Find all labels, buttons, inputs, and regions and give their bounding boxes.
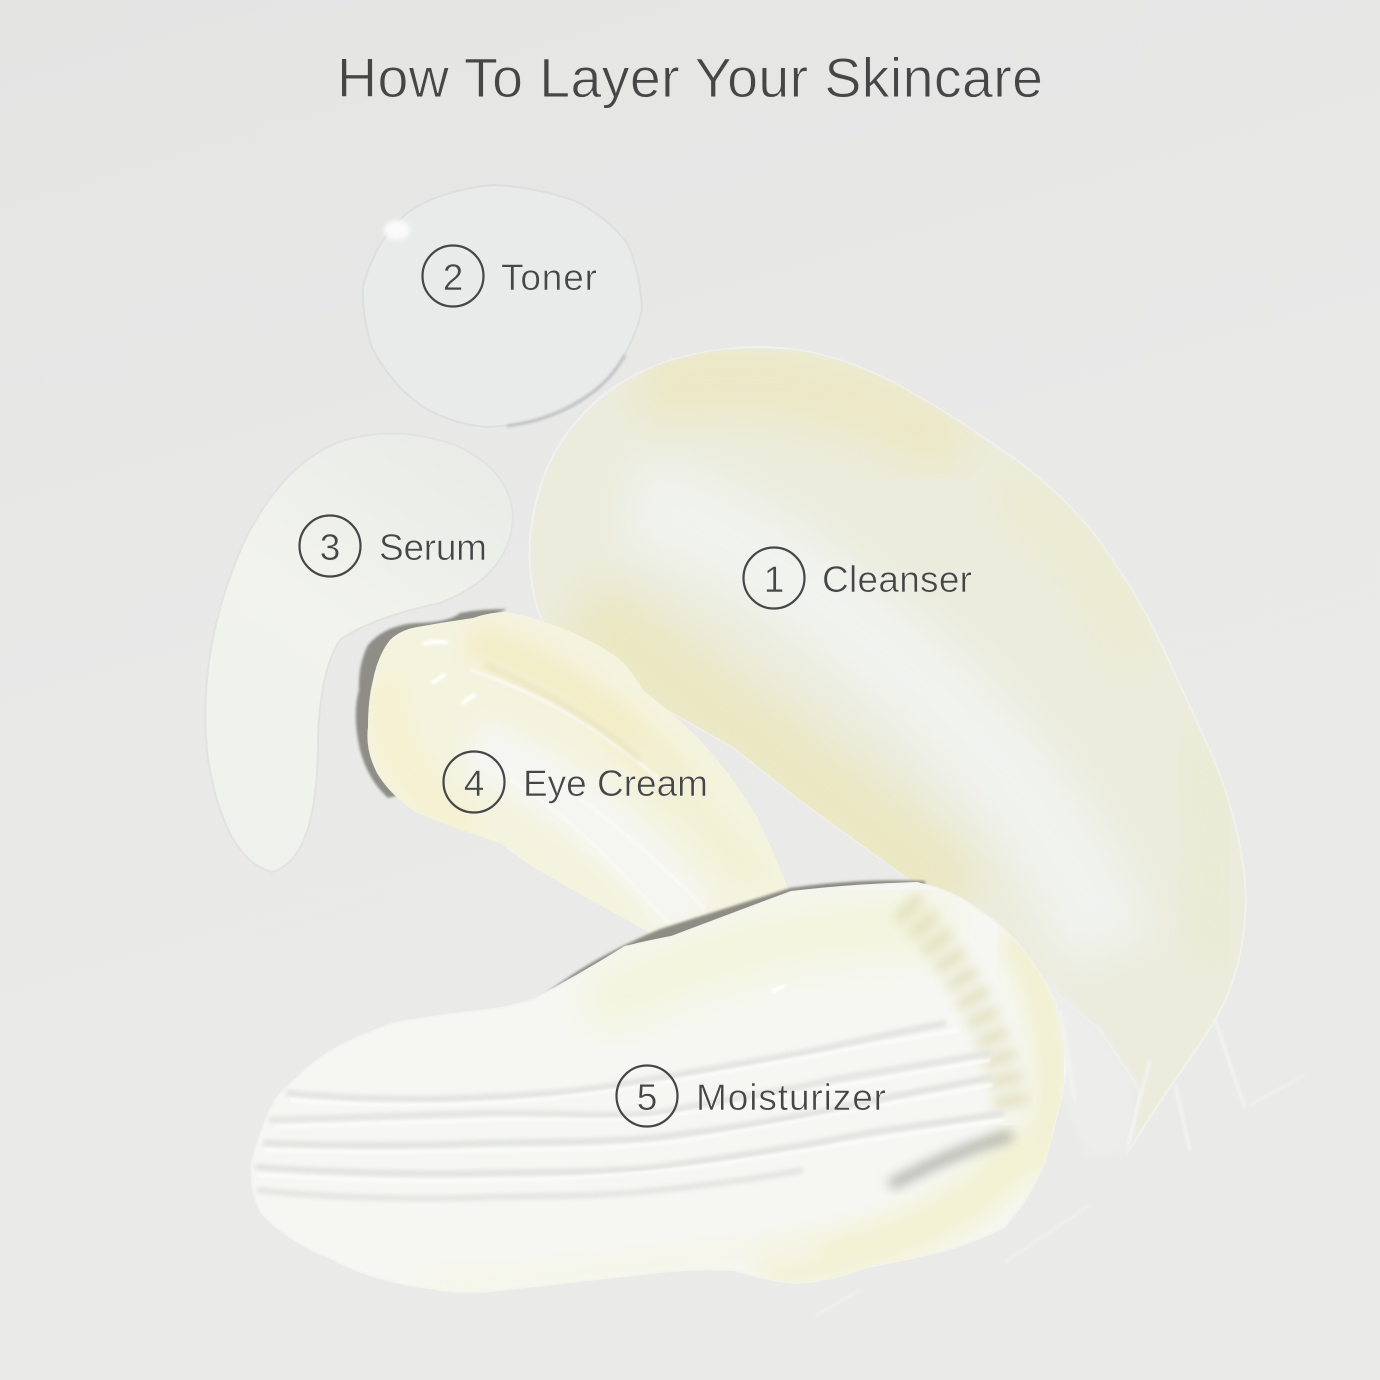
label: 4 Eye Cream: Eye Cream — [523, 763, 708, 804]
swatch: toner — [363, 185, 642, 427]
label: 1 Cleanser — [744, 548, 972, 608]
label: 3 Serum — [300, 516, 487, 576]
label: 1 Cleanser: Cleanser — [822, 559, 972, 600]
swatch: serum — [205, 434, 513, 872]
label: 2 Toner — [422, 246, 597, 306]
label: 1 Cleanser: 1 — [764, 559, 784, 600]
label: 2 Toner: 2 — [443, 257, 463, 298]
label: 5 Moisturizer: 5 — [637, 1077, 657, 1118]
label: 2 Toner: Toner — [501, 257, 597, 298]
label: 5 Moisturizer: Moisturizer — [696, 1077, 886, 1118]
label: 4 Eye Cream: 4 — [464, 763, 484, 804]
swatch: eye cream — [356, 609, 790, 938]
label: 3 Serum: 3 — [320, 527, 340, 568]
title: How To Layer Your Skincare — [337, 47, 1043, 109]
swatch: cleanser — [528, 346, 1244, 1143]
swatch: moisturizer — [252, 880, 1067, 1292]
label: 4 Eye Cream — [444, 752, 708, 812]
label: 3 Serum: Serum — [379, 527, 487, 568]
brush trail — [1040, 975, 1135, 1160]
label: 5 Moisturizer — [616, 1066, 886, 1126]
